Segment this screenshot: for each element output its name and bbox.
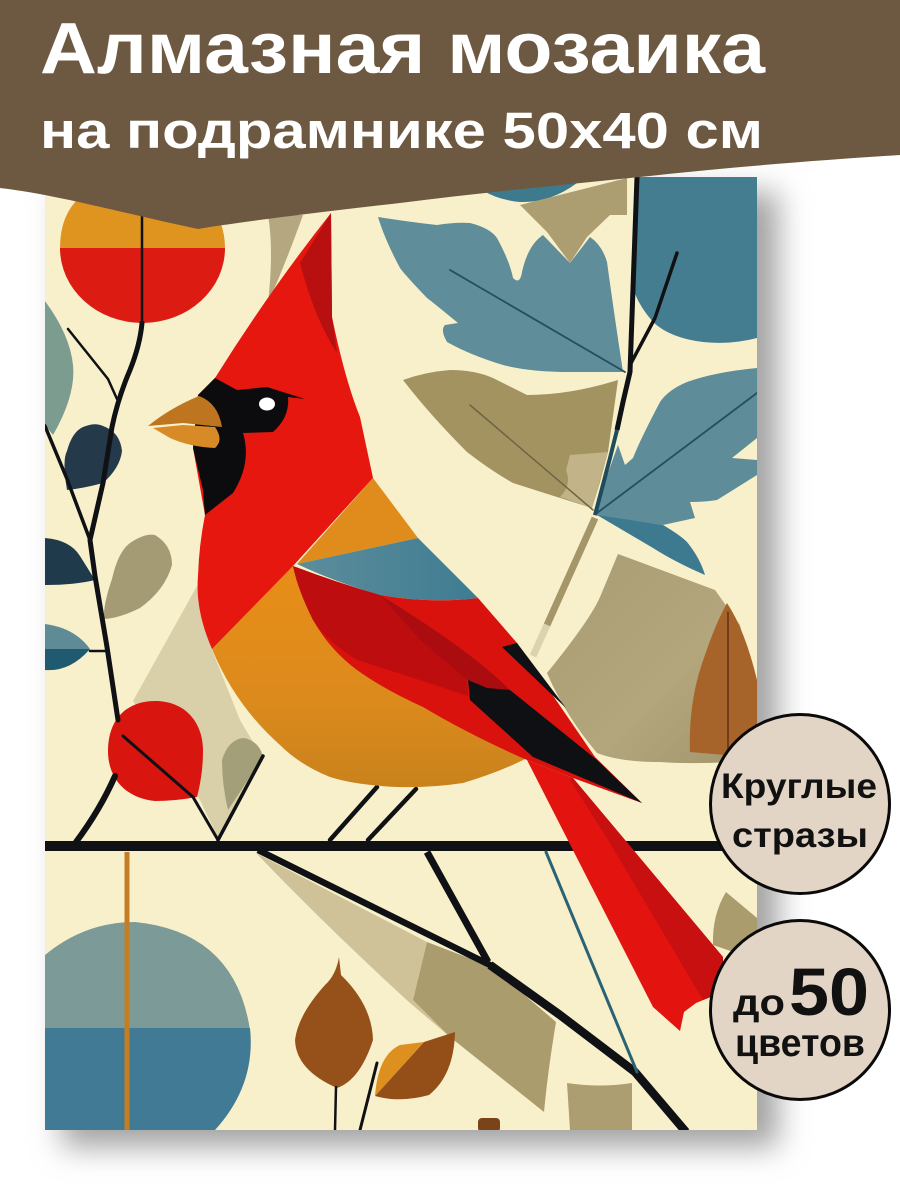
bird: face mask: [193, 378, 305, 515]
bird: blue shoulder: [297, 538, 478, 600]
mosaic canvas artwork: [45, 177, 757, 1132]
branches and stems: [45, 177, 757, 1132]
bottom sphere: [45, 922, 251, 1130]
canvas shadow: [62, 192, 778, 1147]
badge: up to 50 colours: 50: [789, 955, 869, 1030]
red berry: [108, 701, 203, 801]
bird: beak: [148, 396, 222, 427]
bird: crest shade: [300, 213, 337, 353]
bird: eye: [259, 398, 275, 410]
top brown banner: [0, 0, 900, 229]
badge: up to 50 colours: до: [733, 982, 785, 1023]
badge: up to 50 colours: цветов: [735, 1022, 865, 1065]
beige background shapes: [133, 215, 757, 1130]
banner title: Алмазная мозаика: [40, 9, 766, 89]
bird: tail: [527, 760, 723, 1031]
bottom brown leaves: [295, 957, 500, 1132]
bird: orange shoulder: [297, 478, 418, 564]
top leaves: [378, 177, 757, 755]
badge: up to 50 colours: [710, 920, 890, 1100]
bird: wing: [293, 566, 642, 803]
banner subtitle: на подрамнике 50х40 см: [40, 102, 763, 159]
top-left sun: [60, 197, 225, 323]
badge: round rhinestones: Круглые: [721, 767, 877, 806]
badge: round rhinestones: [710, 714, 890, 894]
bird: black wing feathers: [468, 680, 642, 803]
cardinal bird: [148, 213, 723, 1031]
bird: body orange: [212, 566, 527, 787]
badge: round rhinestones: стразы: [732, 816, 868, 855]
bird: head and chest red: [193, 213, 373, 649]
left leaves: [45, 301, 263, 810]
